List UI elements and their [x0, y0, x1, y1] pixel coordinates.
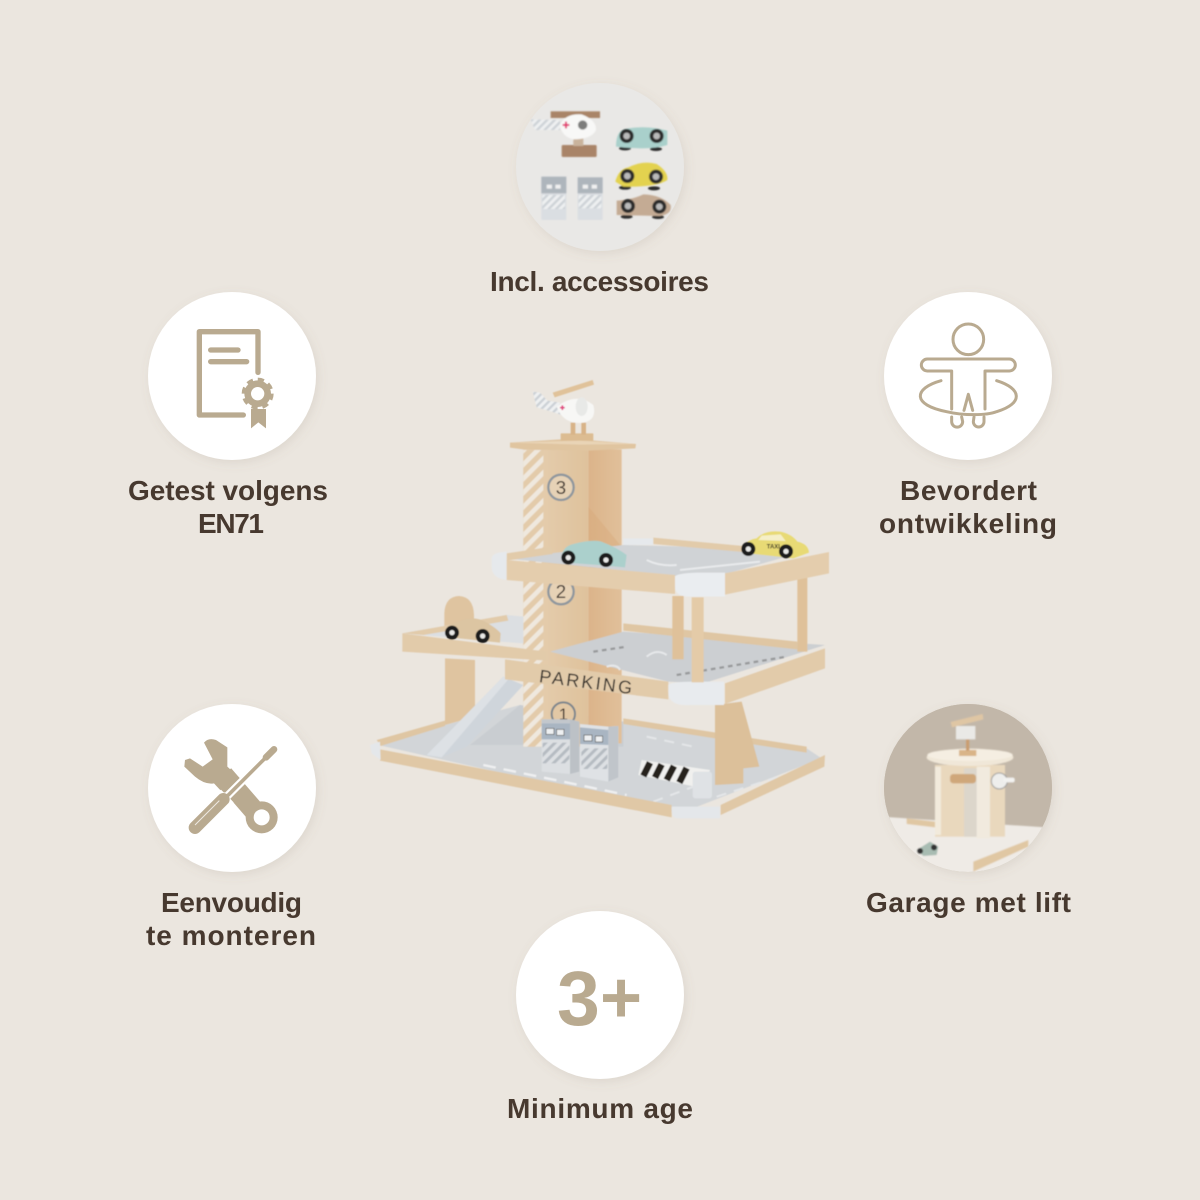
- product: wooden parking garage: [370, 380, 829, 818]
- label: tested: Getest volgens: [128, 475, 328, 506]
- PARKING sign: PARKING: [538, 666, 633, 698]
- tower roof: [510, 423, 636, 451]
- left support: [444, 596, 475, 725]
- icon circle: 3+: [516, 911, 684, 1079]
- photo circle: accessories: [530, 110, 686, 254]
- ramp: [427, 677, 523, 757]
- label: development: [879, 475, 1057, 539]
- label: age: Minimum age: [507, 1093, 693, 1124]
- car: teal: [561, 541, 627, 567]
- feature: development: [879, 292, 1057, 539]
- lift tower: [927, 749, 1015, 838]
- base floor: [377, 705, 822, 813]
- feature: accessories: [492, 110, 708, 292]
- central tower: [523, 449, 622, 747]
- barrier: [638, 760, 712, 798]
- icon circle: wrench and screwdriver: [148, 704, 316, 872]
- car: tan: [445, 618, 501, 643]
- feature: tested to EN71: [128, 292, 328, 539]
- icon circle: child with hoop: [884, 292, 1052, 460]
- yellow taxi toy: [615, 163, 667, 190]
- label: accessories: Incl. accessoires: [490, 266, 709, 297]
- base front rails: [370, 742, 825, 818]
- label: assembly: [146, 887, 316, 951]
- label: assembly: Eenvoudig: [161, 887, 302, 918]
- icon circle: 3+: +: [600, 958, 642, 1038]
- brown car toy: [617, 194, 671, 219]
- helicopter: [533, 380, 594, 423]
- label: assembly: te monteren: [146, 920, 316, 951]
- label: development: ontwikkeling: [879, 508, 1057, 539]
- wooden posts: [672, 577, 807, 682]
- label: development: Bevordert: [900, 475, 1037, 506]
- car: yellow taxi: [741, 531, 809, 558]
- icon circle: 3+: 3: [557, 956, 600, 1042]
- feature: minimum age: [507, 911, 693, 1124]
- right support: [715, 702, 759, 785]
- top deck: [492, 538, 829, 597]
- label: lift: Garage met lift: [866, 887, 1071, 918]
- lift helicopter: [951, 714, 983, 756]
- teal car toy: [616, 127, 667, 151]
- car: yellow taxi: TAXI: [767, 545, 780, 551]
- feature: easy assembly: [146, 704, 316, 951]
- middle deck: [402, 615, 825, 705]
- label: tested: [128, 475, 328, 539]
- helicopter toy: [531, 111, 600, 157]
- label: tested: EN71: [198, 508, 264, 539]
- central tower: 3: [556, 477, 566, 498]
- fuel pump toys: [541, 177, 603, 220]
- fuel pumps: [542, 719, 618, 782]
- feature: garage with lift: [866, 700, 1071, 918]
- central tower: 2: [556, 581, 566, 602]
- small car: [917, 842, 938, 856]
- photo circle: lift: [884, 704, 1054, 875]
- central tower: 1: [559, 705, 568, 724]
- icon circle: certificate: [148, 292, 316, 460]
